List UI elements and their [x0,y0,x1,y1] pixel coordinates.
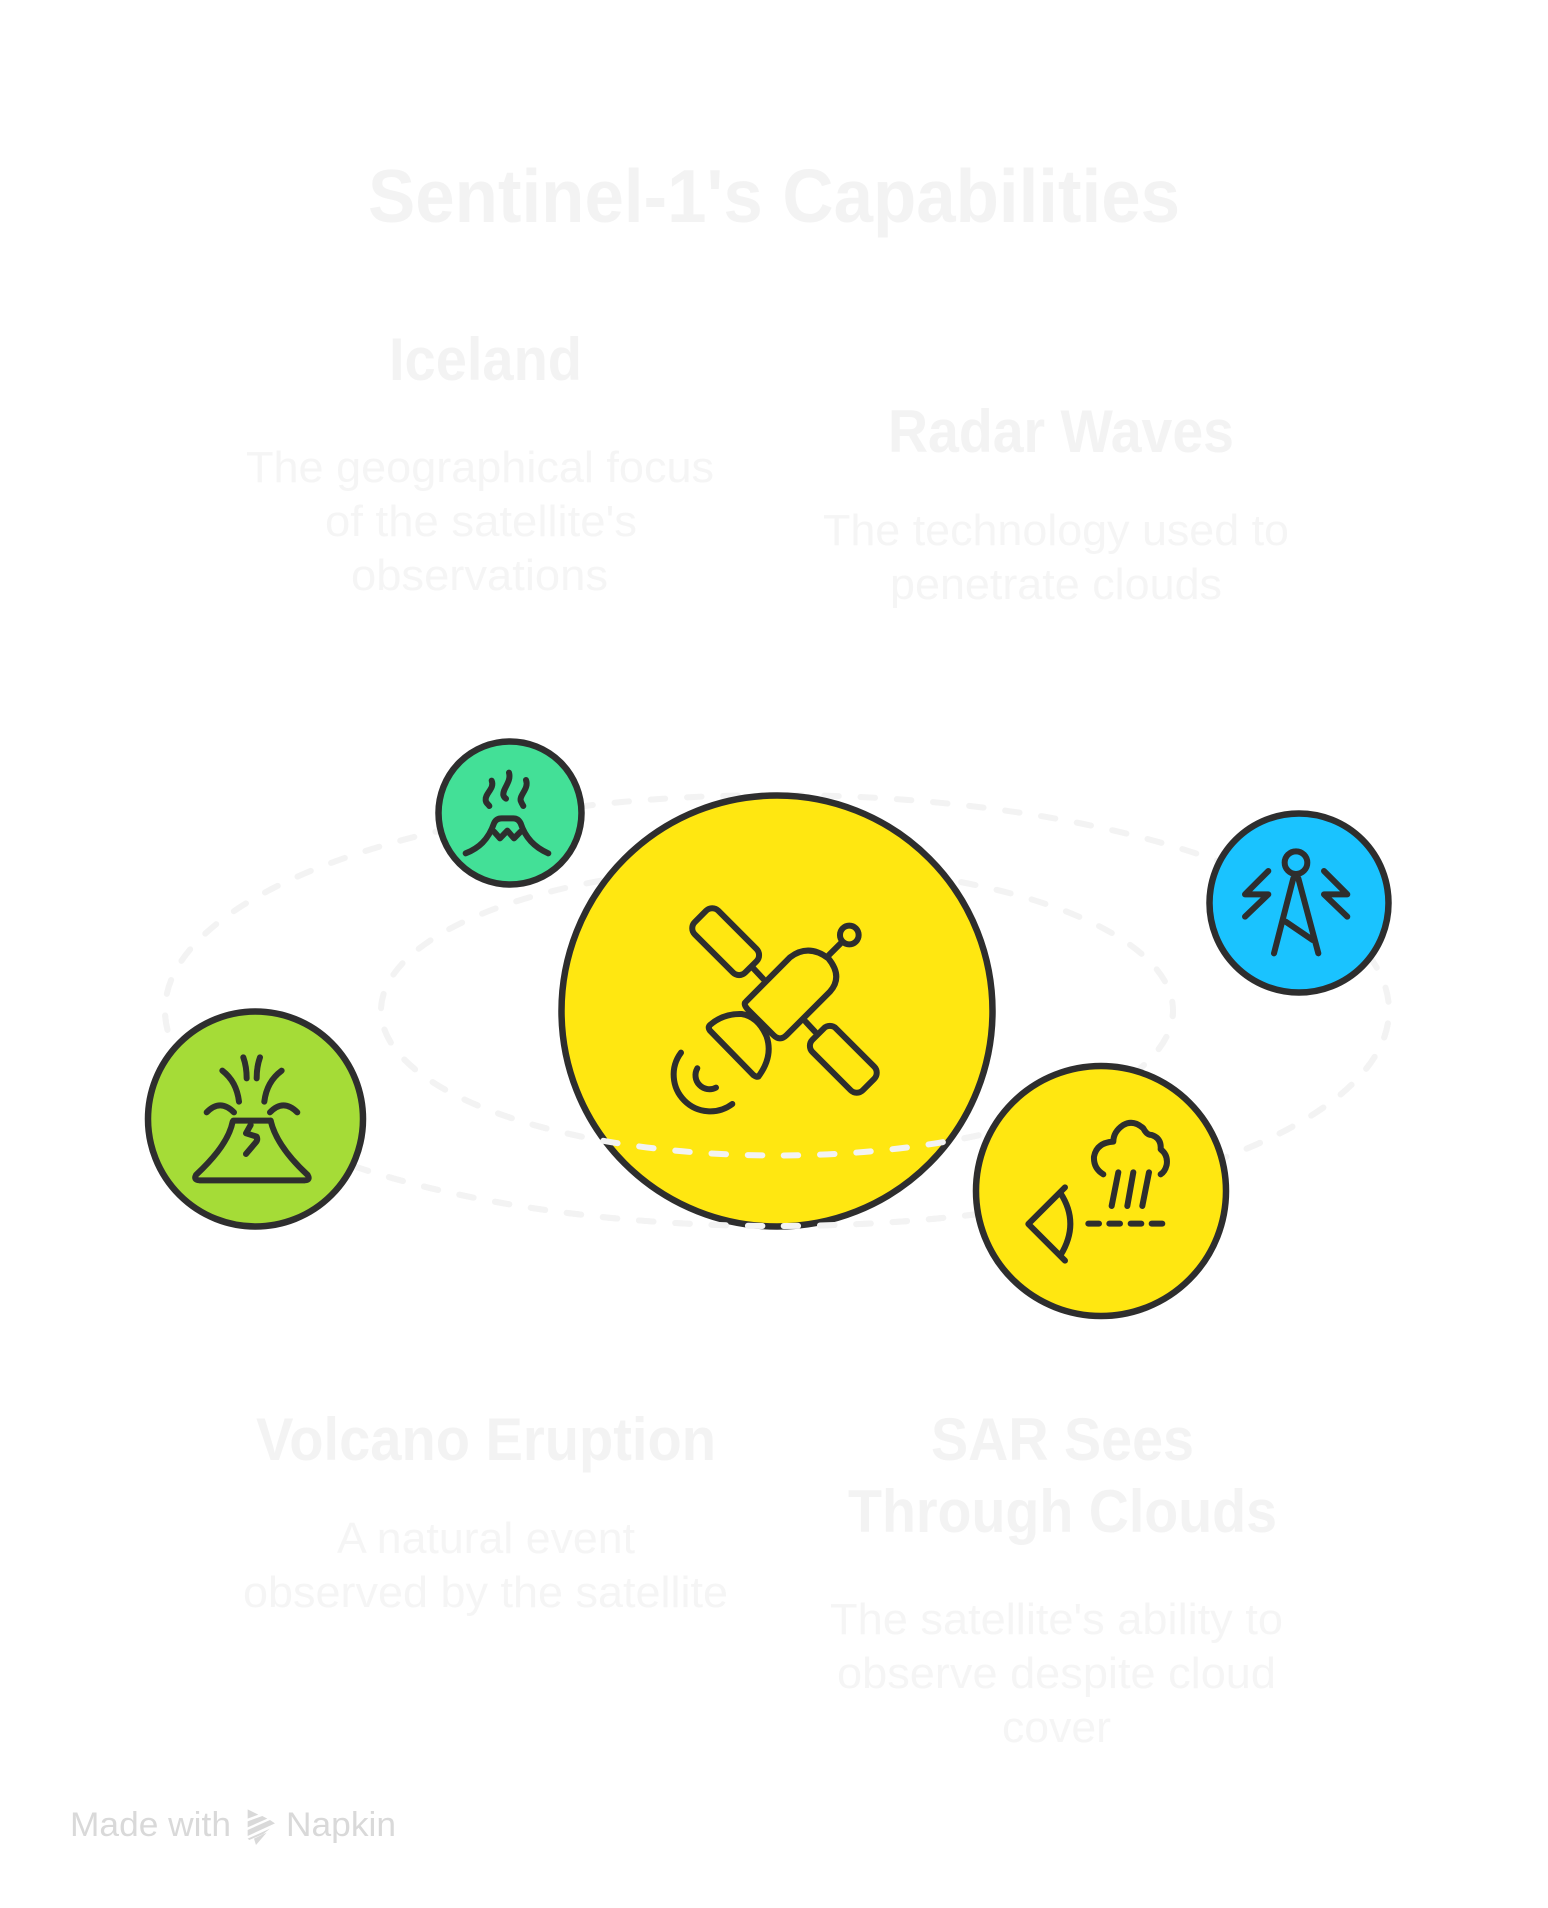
node: SAR Sees Through Clouds [976,1066,1226,1316]
panel: Iceland [246,326,714,600]
heading: SAR Sees Through Clouds: SAR Sees [931,1406,1194,1473]
description: SAR Sees Through Clouds: The satellite's ability to [830,1595,1283,1644]
orbits: front half [600,1138,946,1229]
watermark: Made with Napkin: Napkin [286,1806,396,1844]
description: Radar Waves [823,506,1289,609]
panel: Radar Waves [823,398,1289,609]
description: Radar Waves: The technology used to [823,506,1289,555]
icon: radar dish and rain cloud [1028,1123,1167,1261]
watermark: Made with Napkin [70,1806,396,1845]
description: Iceland: The geographical focus [246,443,714,492]
description: Volcano Eruption [243,1514,728,1617]
node: Radar Waves [1210,814,1388,992]
central satellite node [562,796,992,1226]
icon: radar tower [1245,851,1347,953]
circle: central [562,796,992,1226]
description: Iceland: of the satellite's [325,497,637,546]
heading: SAR Sees Through Clouds [848,1406,1277,1545]
watermark: Made with Napkin: Made with [70,1806,231,1844]
heading: Volcano Eruption: Volcano Eruption [256,1406,716,1473]
icon: satellite [674,905,880,1111]
description: Radar Waves: penetrate clouds [890,560,1222,609]
orbits: back half [165,795,1389,1226]
description: Volcano Eruption: A natural event [337,1514,635,1563]
heading: SAR Sees Through Clouds: Through Clouds [848,1478,1277,1545]
panel: Volcano Eruption [243,1406,728,1617]
description: SAR Sees Through Clouds: cover [1002,1703,1111,1752]
icon: erupting volcano [195,1057,309,1180]
description: Iceland: observations [351,551,608,600]
description: Iceland [246,443,714,600]
description: SAR Sees Through Clouds [830,1595,1283,1752]
heading: Iceland: Iceland [389,326,582,393]
node: Iceland [438,742,582,884]
description: SAR Sees Through Clouds: observe despite cloud [837,1649,1276,1698]
node: Volcano Eruption [148,1012,363,1226]
heading: Radar Waves: Radar Waves [888,398,1234,465]
icon: Napkin logo [248,1809,275,1845]
title: Sentinel-1's Capabilities [368,154,1180,238]
panel: SAR Sees Through Clouds [830,1406,1283,1752]
description: Volcano Eruption: observed by the satellite [243,1568,728,1617]
icon: steaming volcano [466,773,548,853]
